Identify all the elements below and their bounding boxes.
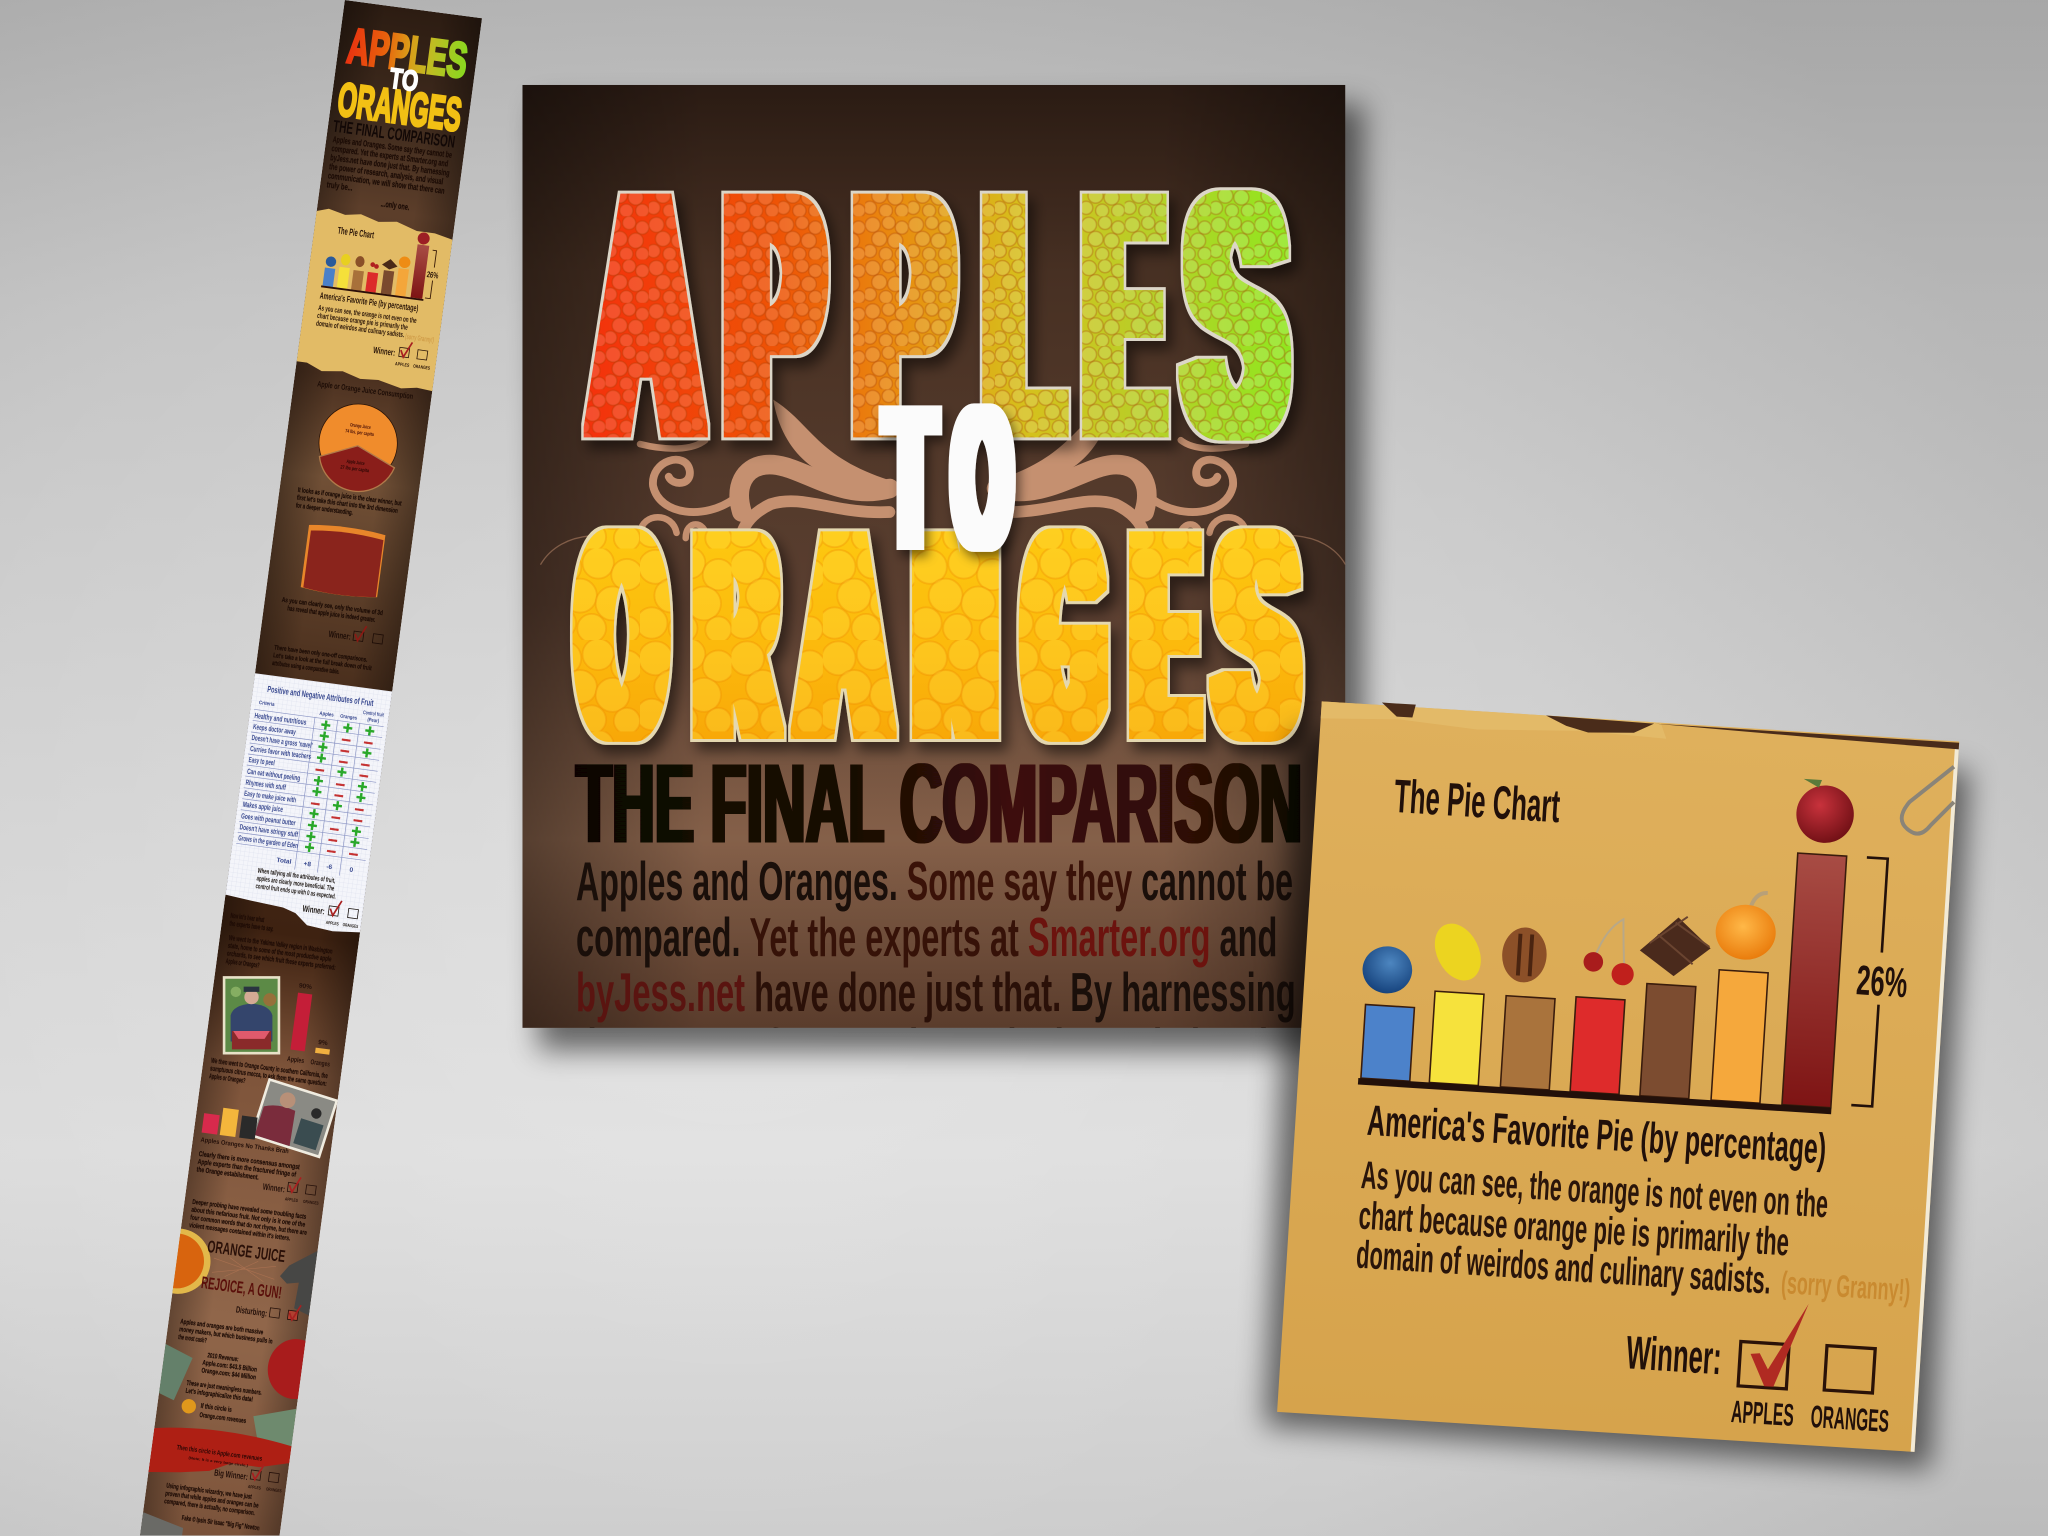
strip deeper probing text: four common words that do not rhyme, but there are xyxy=(190,1214,307,1237)
strip conclusion text: Using infographic wizardry, we have just xyxy=(166,1483,253,1501)
strip winner checkbox: Winner: xyxy=(328,629,351,642)
table plus and minus marks: + xyxy=(342,718,354,738)
icon: orange slice xyxy=(141,1224,215,1298)
panel: strip attributes table: Curries favor with teachers xyxy=(250,744,312,761)
icon: cherries xyxy=(1582,917,1637,986)
panel: strip attributes table: +8 xyxy=(303,861,312,868)
title word: APPLES: L xyxy=(987,125,1059,504)
strip cup caption xyxy=(282,597,383,622)
strip red circle band: (Note: It is a very large circle.) xyxy=(188,1456,249,1468)
icon: apple xyxy=(1795,778,1856,845)
strip experts text: the experts have to say. xyxy=(229,920,274,933)
strip deeper probing text: about this nefarious fruit. Not only is it one of the xyxy=(191,1207,306,1229)
panel: strip attributes table: Can eat without peeling xyxy=(247,767,301,783)
strip winner checkbox: APPLES xyxy=(326,920,339,927)
strip intro text: ...only one. xyxy=(380,198,410,212)
panel: title crop: O xyxy=(953,367,1011,589)
title word: ORANGES: S xyxy=(1219,474,1294,795)
table plus and minus marks: + xyxy=(356,777,369,797)
title word: ORANGES: E xyxy=(1136,474,1194,795)
strip juice paragraph: for a deeper understanding. xyxy=(295,502,353,517)
title word: APPLES: P xyxy=(728,125,820,504)
panel: strip pie chart section: America's Favorite Pie (by percentage) xyxy=(319,290,419,313)
strip revenue figures: Let's infographicalize this data! xyxy=(185,1388,253,1404)
panel: strip attributes table: control fruit ends up with 0 as expected. xyxy=(255,883,336,901)
torn top edge xyxy=(1321,699,1959,760)
strip bar chart xyxy=(321,232,438,301)
strip conclusion text: proven that while apples and oranges can be xyxy=(165,1490,259,1510)
table plus and minus marks: + xyxy=(331,796,344,816)
strip juice pie chart: 27 lbs per capita xyxy=(340,465,369,474)
strip winner checkbox: ORANGES xyxy=(413,364,430,371)
table plus and minus marks xyxy=(303,715,376,864)
strip winner checkbox xyxy=(261,1173,322,1206)
icon: gun xyxy=(275,1246,318,1316)
strip winner checkbox xyxy=(328,621,384,646)
title word: ORANGES: R xyxy=(699,474,773,795)
strip Orange County text: We then went to Orange County in southern California, the xyxy=(211,1058,328,1080)
table plus and minus marks: + xyxy=(349,832,361,853)
strip bar chart: 26% xyxy=(426,269,439,281)
strip revenue question: the most cash? xyxy=(178,1334,207,1345)
table plus and minus marks: – xyxy=(337,751,349,771)
table plus and minus marks: – xyxy=(362,732,374,752)
panel: strip pie chart section: As you can see, the orange is not even on the xyxy=(318,303,417,325)
panel: strip attributes table: Doesn't have a gross 'navel' xyxy=(251,733,313,750)
strip juice pie chart xyxy=(318,404,398,492)
table plus and minus marks: – xyxy=(309,793,321,813)
table plus and minus marks: + xyxy=(306,815,319,836)
panel: strip attributes table: Grows in the garden of Eden xyxy=(238,833,299,850)
strip big winner checkbox: APPLES xyxy=(248,1484,261,1491)
card body text xyxy=(1355,1154,1917,1311)
strip intro text: truly be... xyxy=(326,179,353,193)
strip title xyxy=(338,28,468,132)
winner checkbox: APPLES xyxy=(1730,1394,1795,1433)
strip transition text: Let's take a look at the full break down of fruit xyxy=(273,652,373,672)
strip revenue question: Apples and oranges are both massive xyxy=(180,1318,264,1336)
panel: strip attributes table: Criteria xyxy=(259,700,275,708)
strip winner checkbox: APPLES xyxy=(285,1196,298,1203)
strip title: ORANGES xyxy=(335,72,465,141)
panel: strip attributes table: Doesn't have stringy stuff xyxy=(239,822,299,839)
winner checkbox: ORANGES xyxy=(1810,1399,1890,1439)
strip intro text: communication, we will show that there can xyxy=(327,170,445,196)
strip bar chart: Yakima experts: Apples xyxy=(287,1056,304,1065)
icon: pecan xyxy=(1501,926,1548,984)
strip consensus text: the Orange establishment. xyxy=(196,1166,259,1182)
winner checkbox xyxy=(1622,1293,1896,1439)
strip photo: portrait xyxy=(140,1512,184,1536)
title word: TO: T xyxy=(886,367,935,589)
title word: ORANGES: O xyxy=(581,474,662,795)
icon: chocolate xyxy=(1638,914,1713,978)
panel: strip pie chart section xyxy=(295,207,454,392)
panel: strip attributes table: Easy to make juice with xyxy=(244,789,297,805)
table plus and minus marks: + xyxy=(308,804,320,824)
intro text: the power of research, analysis, and visual xyxy=(576,1017,1268,1079)
strip cup caption: As you can clearly see, only the volume of 3d xyxy=(281,597,383,617)
icon: dollar bill xyxy=(158,1344,194,1402)
bracket and 26 percent: 26% xyxy=(1855,956,1909,1006)
strip winner checkbox: ORANGES xyxy=(342,922,359,929)
panel: strip pie chart section: The Pie Chart xyxy=(337,226,375,241)
card body text: (sorry Granny!) xyxy=(1780,1265,1911,1308)
strip intro text xyxy=(326,136,452,210)
strip Orange County text: Apples or Oranges? xyxy=(209,1073,246,1085)
panel: title crop xyxy=(522,85,1358,1079)
strip bar chart: Yakima experts: 90% xyxy=(298,982,313,991)
strip Orange County text: sumptuous citrus mecca, to ask them the same question: xyxy=(210,1065,327,1088)
strip cup caption: has reveal that apple juice is indeed greater. xyxy=(287,605,376,624)
intro text: byJess.net have done just that. By harnessing xyxy=(576,961,1296,1023)
strip revenue figures xyxy=(185,1350,266,1405)
table plus and minus marks: + xyxy=(320,715,332,735)
strip consensus text: Clearly there is more consensus amongst xyxy=(198,1151,301,1171)
strip deeper probing text: Deeper probing have revealed some troubling facts xyxy=(192,1199,307,1221)
panel: strip attributes table: Easy to peel xyxy=(248,755,275,767)
strip bar chart: Yakima experts xyxy=(287,982,340,1069)
panel: strip attributes table: Total xyxy=(276,857,292,866)
icon: lemon xyxy=(1426,916,1490,988)
strip juice paragraph: first let's take this chart into the 3rd dimension xyxy=(296,495,398,515)
strip winner checkbox xyxy=(374,342,430,370)
strip juice paragraph xyxy=(296,487,402,516)
title word: ORANGES: G xyxy=(1028,474,1101,795)
strip circle caption xyxy=(199,1403,248,1425)
icon: blueberry xyxy=(1361,945,1414,995)
strip consensus text xyxy=(196,1151,301,1187)
strip deeper probing text xyxy=(189,1199,309,1245)
table plus and minus marks: – xyxy=(359,754,371,774)
strip revenue question xyxy=(178,1318,274,1353)
table plus and minus marks: + xyxy=(350,821,363,842)
panel: strip attributes table: Rhymes with stuff xyxy=(245,778,287,792)
strip conclusion text xyxy=(162,1483,264,1532)
panel: strip pie chart section: (sorry Granny!) xyxy=(405,332,435,345)
strip winner checkbox: Winner: xyxy=(373,345,396,358)
panel: strip pie chart section: domain of weirdos and culinary sadists. xyxy=(316,319,405,339)
strip transition text xyxy=(272,644,374,680)
card right edge highlight xyxy=(1911,744,1959,1452)
winner checkbox: Winner: xyxy=(1625,1325,1723,1384)
panel: strip attributes table: Positive and Negative Attributes of Fruit xyxy=(267,684,374,708)
bars xyxy=(1361,827,1847,1108)
panel: strip attributes table: Makes apple juice xyxy=(242,800,284,814)
strip consensus text: Apple experts than the fractured fringe of xyxy=(197,1159,297,1179)
strip heading: THE FINAL COMPARISON xyxy=(332,117,456,152)
strip experts text: We went to the Yakima Valley region in Washington xyxy=(228,935,333,956)
icon: orange revenue circle xyxy=(181,1398,197,1414)
strip revenue figures: 2010 Revenue: xyxy=(207,1352,239,1363)
strip intro text: byJess.net have done just that. By harnessing xyxy=(330,152,450,178)
panel: strip attributes table: Oranges xyxy=(340,714,357,722)
heading: the final comparison: THE FINAL COMPARISON xyxy=(576,740,1302,867)
panel: long infographic strip xyxy=(140,0,482,1536)
strip red circle band xyxy=(148,1422,292,1490)
strip big winner checkbox xyxy=(213,1459,285,1493)
title word: APPLES: P xyxy=(857,125,950,504)
panel: strip attributes table: Control fruit xyxy=(363,710,384,719)
table plus and minus marks: – xyxy=(314,759,326,779)
strip juice pie chart: Orange Juice xyxy=(350,422,371,431)
intro text: Apples and Oranges. Some say they cannot be xyxy=(576,850,1293,912)
title word: APPLES: E xyxy=(1088,125,1160,504)
strip revenue figures: These are just meaningless numbers. xyxy=(186,1380,262,1397)
bar chart: favorite pies xyxy=(1355,752,1920,1119)
panel: strip attributes table: Keeps doctor away xyxy=(253,722,297,737)
title word: APPLES: S xyxy=(1187,125,1284,504)
title word: APPLES: A xyxy=(593,125,699,504)
panel: strip pie chart section: chart because orange pie is primarily the xyxy=(317,311,408,332)
strip experts text: state, home to some of the most productive apple xyxy=(227,943,332,963)
strip disturbing checkbox: Disturbing: xyxy=(235,1304,268,1318)
strip winner checkbox: Winner: xyxy=(262,1182,286,1194)
strip disturbing checkbox xyxy=(235,1297,301,1323)
panel: strip attributes table xyxy=(223,673,392,935)
table plus and minus marks: + xyxy=(312,771,325,791)
strip winner checkbox: APPLES xyxy=(395,361,410,368)
table plus and minus marks: – xyxy=(348,843,359,863)
table plus and minus marks: – xyxy=(326,840,337,861)
strip intro text: the power of research, analysis, and visual xyxy=(329,161,444,186)
panel: strip attributes table: (Pear) xyxy=(367,717,380,725)
anagram: orange juice: REJOICE, A GUN! xyxy=(200,1273,283,1303)
title word: ORANGES xyxy=(522,474,1358,795)
strip circle caption: Orange.com revenues xyxy=(199,1412,247,1425)
strip intro text: Apples and Oranges. Some say they cannot be xyxy=(332,134,453,160)
strip Orange County text xyxy=(209,1058,328,1096)
panel: strip attributes table: Goes with peanut butter xyxy=(241,811,296,828)
title word: APPLES xyxy=(522,125,1358,522)
strip revenue figures: Orange.com: $44 Million xyxy=(201,1367,256,1382)
strip circle caption: If this circle is xyxy=(200,1403,232,1414)
ornament: scrolls xyxy=(541,400,1345,575)
strip title: TO xyxy=(388,63,420,98)
panel: strip attributes table: Apples xyxy=(319,711,334,719)
strip bar chart: Yakima experts: 9% xyxy=(318,1039,328,1047)
intro text xyxy=(576,850,1296,1079)
table plus and minus marks: + xyxy=(318,726,331,746)
strip experts text xyxy=(224,913,341,980)
table plus and minus marks: – xyxy=(327,829,339,850)
panel shadow xyxy=(538,104,1364,1050)
strip winner checkbox xyxy=(301,896,361,929)
table plus and minus marks: + xyxy=(364,721,376,741)
icon: pumpkin xyxy=(1714,890,1778,961)
table plus and minus marks: + xyxy=(336,762,348,782)
anagram: orange juice: ORANGE JUICE xyxy=(206,1237,286,1266)
panel: strip attributes table: Healthy and nutritious xyxy=(254,711,307,727)
strip winner checkbox: Winner: xyxy=(302,904,325,916)
strip intro text: compared. Yet the experts at Smarter.org and xyxy=(331,143,449,169)
strip experts text: orchards, to see which fruit these experts preferred: xyxy=(226,950,336,972)
anagram: orange juice xyxy=(200,1237,288,1303)
icon: paperclip xyxy=(1902,767,1954,834)
strip juice paragraph: It looks as if orange juice is the clear winner, but xyxy=(297,487,402,508)
table plus and minus marks: – xyxy=(334,774,346,794)
panel: pie chart card xyxy=(1277,699,1959,1452)
strip title: APPLES xyxy=(344,17,471,89)
table plus and minus marks: + xyxy=(361,743,373,763)
table plus and minus marks: – xyxy=(330,807,342,827)
strip conclusion text: compared, there is actually, no comparison. xyxy=(164,1498,255,1517)
card title: The Pie Chart xyxy=(1393,769,1562,832)
strip juice heading: Apple or Orange Juice Consumption xyxy=(317,379,414,401)
panel: strip attributes table: -6 xyxy=(326,864,333,871)
table plus and minus marks: + xyxy=(305,826,317,847)
strip juice pie chart: Apple Juice xyxy=(346,459,365,467)
title word: ORANGES: N xyxy=(918,474,993,795)
strip transition text: attributes using a comparative table. xyxy=(272,660,340,676)
panel: strip attributes table: 0 xyxy=(349,867,354,874)
strip winner checkbox: ORANGES xyxy=(303,1199,319,1206)
strip experts text: Now let's hear what xyxy=(230,913,265,924)
strip transition text: There have been only one-off comparisons. xyxy=(274,644,368,664)
strip revenue figures: Apple.com: $43.5 Billion xyxy=(202,1360,257,1374)
strip photo: apple farmer xyxy=(223,976,280,1055)
icon: cash stack xyxy=(249,1403,297,1458)
intro text: compared. Yet the experts at Smarter.org and xyxy=(576,906,1277,968)
strip bar chart: Orange County experts: Apples Oranges No Thanks Brah xyxy=(200,1137,289,1155)
panel: strip attributes table: When tallying all the attributes of fruit, xyxy=(257,868,336,885)
table plus and minus marks: – xyxy=(354,799,365,819)
strip juice pie chart: 74 lbs. per capita xyxy=(345,428,374,438)
table plus and minus marks: – xyxy=(333,785,345,805)
table plus and minus marks: + xyxy=(315,748,328,768)
table plus and minus marks: – xyxy=(339,740,351,760)
strip bar chart: Yakima experts: Oranges xyxy=(310,1059,330,1069)
table plus and minus marks: – xyxy=(352,810,364,830)
panel: strip attributes table: apples are clearly more beneficial. The xyxy=(256,875,335,893)
card paper xyxy=(1277,701,1959,1452)
title word: ORANGES: A xyxy=(801,474,887,795)
table plus and minus marks: – xyxy=(328,818,340,839)
strip revenue question: money makers, but which business pulls in xyxy=(179,1326,273,1346)
strip big winner checkbox: ORANGES xyxy=(266,1486,282,1493)
bracket and 26 percent xyxy=(1849,857,1915,1108)
strip red circle band: Then this circle is Apple.com revenues xyxy=(176,1444,263,1463)
table plus and minus marks: – xyxy=(358,765,370,785)
table plus and minus marks: – xyxy=(340,729,352,749)
card shadow xyxy=(1264,731,1970,1469)
strip bar chart: Orange County experts xyxy=(200,1105,293,1155)
strip deeper probing text: violent messages contained within it's letters. xyxy=(189,1222,291,1243)
strip 3D juice cup xyxy=(300,522,386,600)
strip big winner checkbox: Big Winner: xyxy=(214,1468,249,1482)
table plus and minus marks: + xyxy=(317,737,329,757)
table plus and minus marks: + xyxy=(311,782,323,802)
table plus and minus marks: + xyxy=(355,788,367,808)
table plus and minus marks: + xyxy=(303,837,316,858)
icon: red apple xyxy=(264,1336,326,1402)
strip experts text: Apples or Oranges? xyxy=(225,958,260,970)
strip photo: orange grower xyxy=(250,1078,338,1158)
